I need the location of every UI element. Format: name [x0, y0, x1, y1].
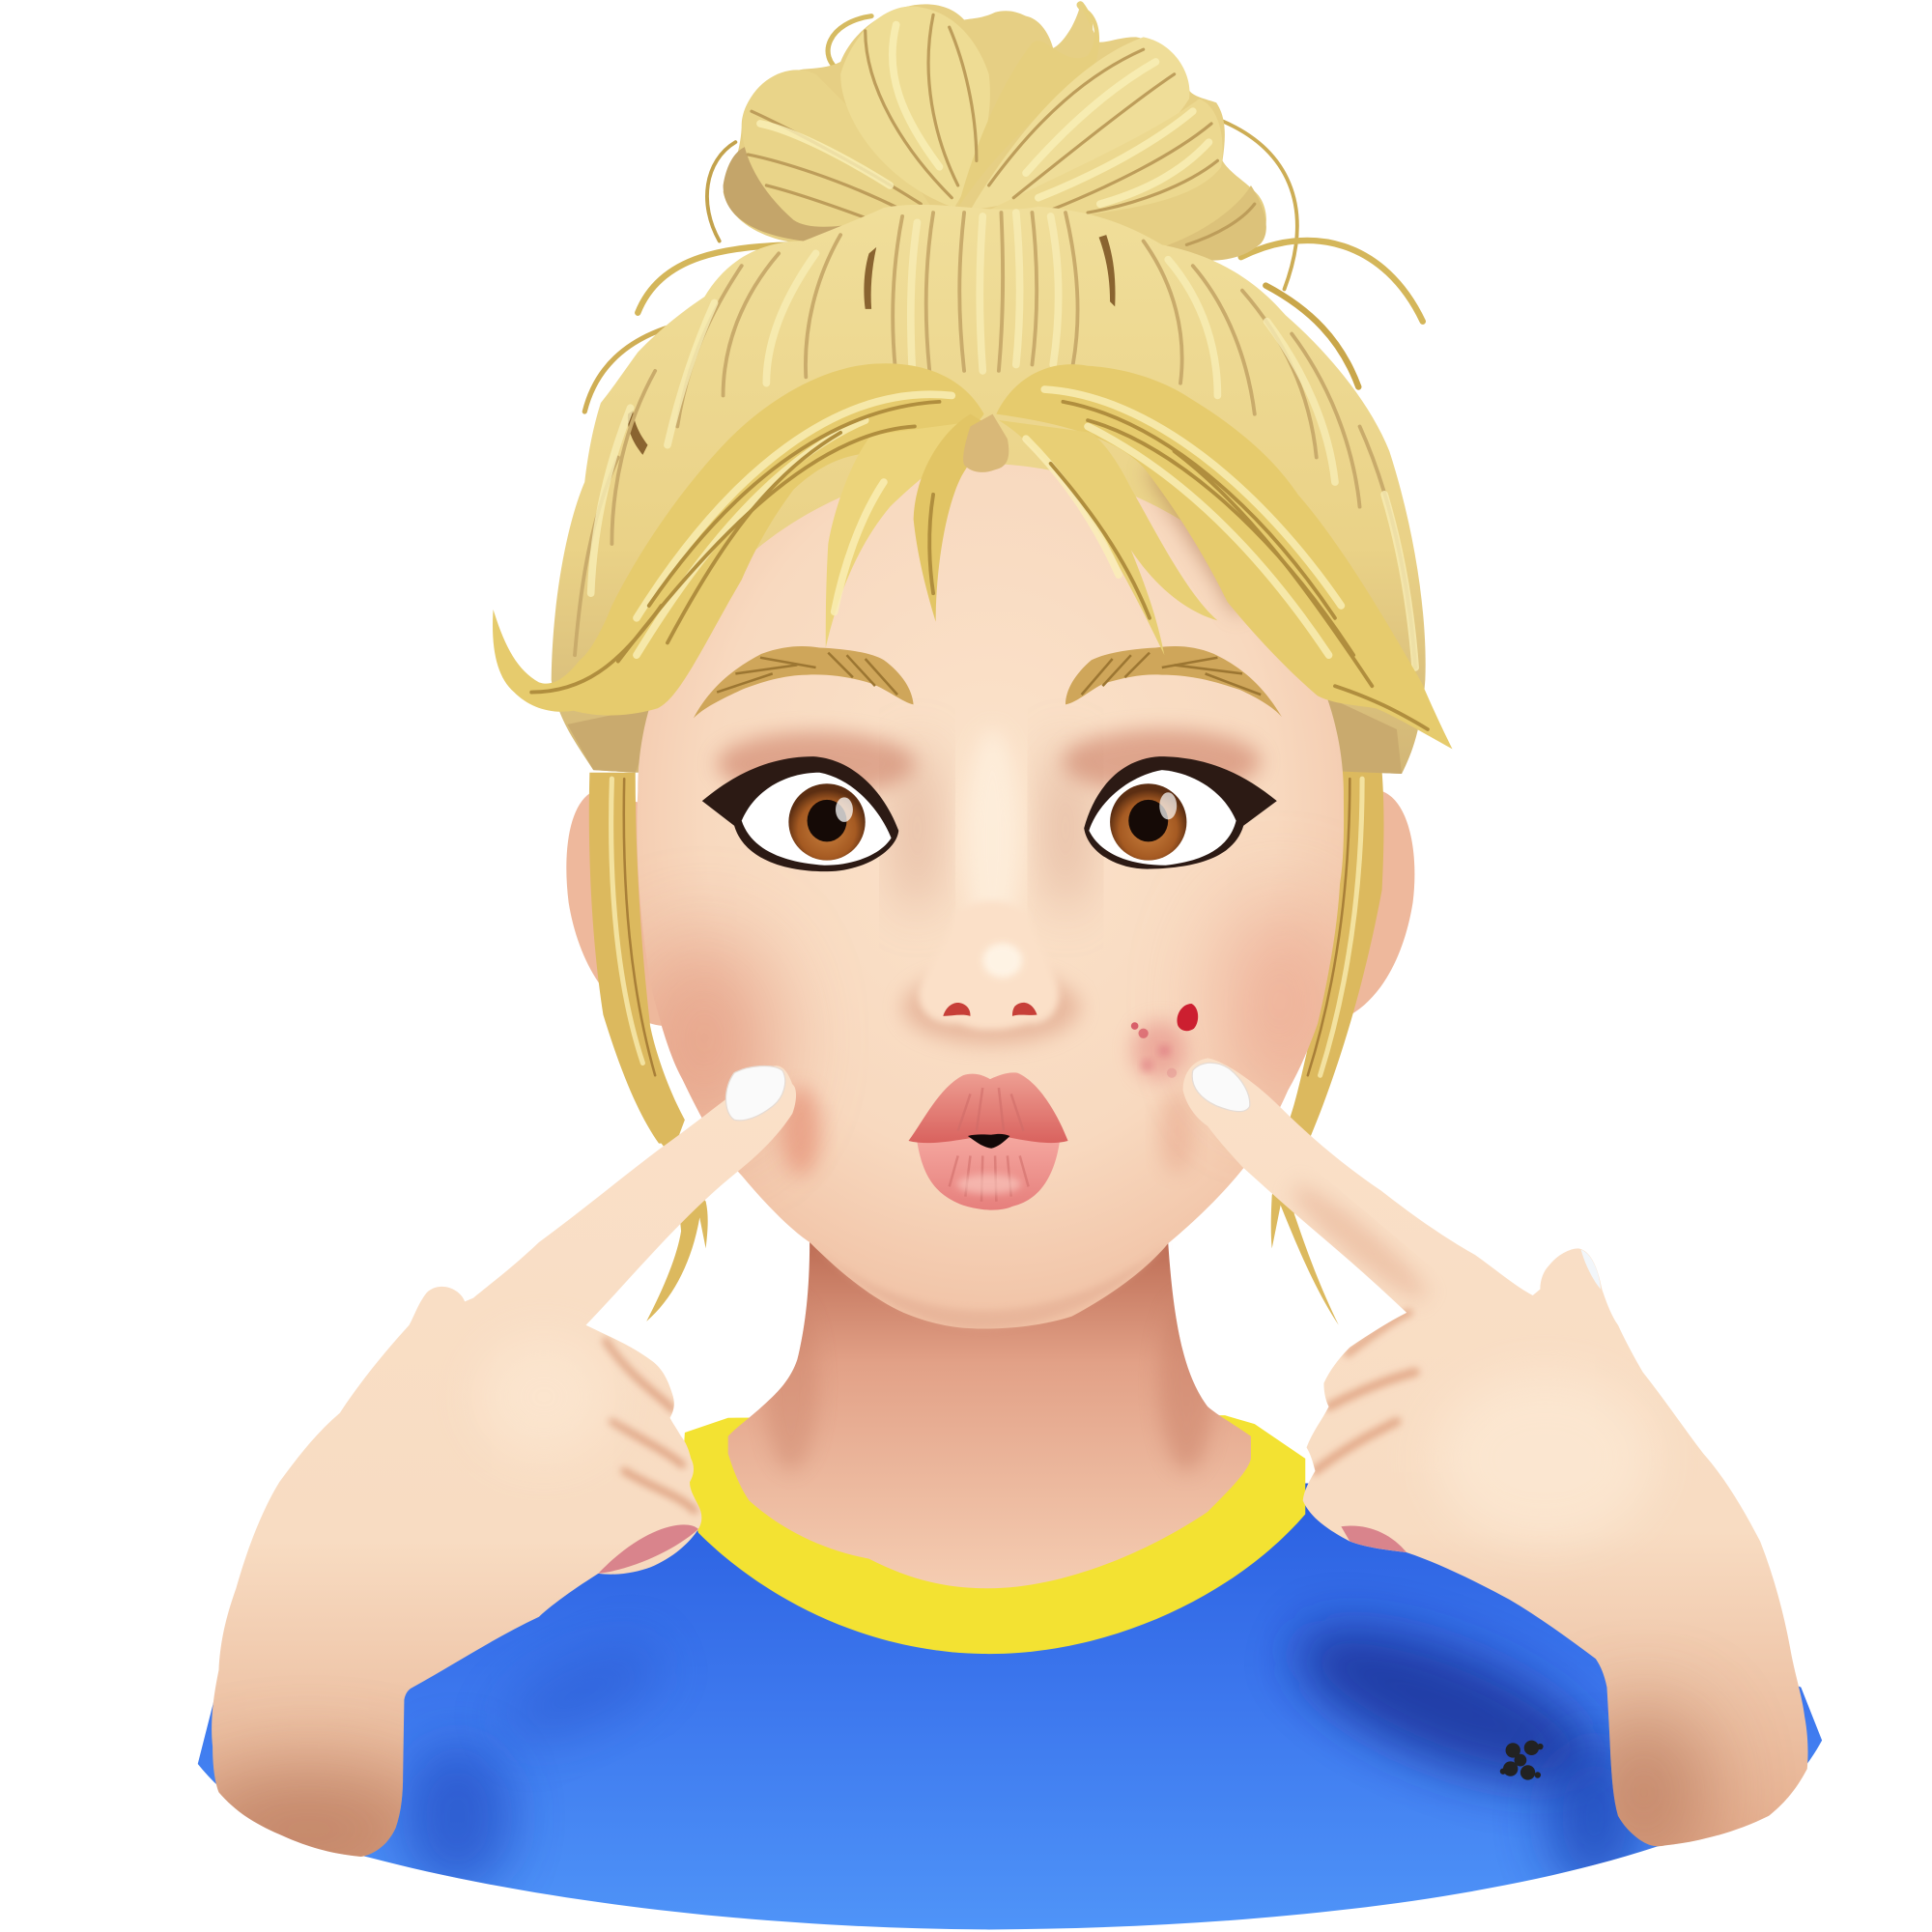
left finger creases	[606, 1341, 695, 1511]
right strand with tips	[999, 420, 1217, 655]
right eyebrow	[1065, 646, 1282, 717]
right palm crease	[1341, 1525, 1406, 1552]
hair: side strands behind the face	[589, 771, 1384, 1325]
face	[631, 464, 1344, 1329]
right fingernail	[1192, 1063, 1250, 1112]
left eyebrow	[694, 646, 914, 718]
right thumb nail	[1581, 1250, 1601, 1290]
right hand lower arm shading	[1582, 1706, 1706, 1879]
hair: main updo mass	[552, 205, 1426, 774]
hair: fringe and swept bangs	[493, 363, 1453, 749]
cheek blush left	[631, 933, 779, 1144]
right swept band	[996, 364, 1453, 749]
hair: tan side sections above the ears	[567, 693, 1402, 774]
right finger creases	[1315, 1313, 1415, 1471]
left hand lower arm shading	[213, 1723, 404, 1857]
fingertip redness	[781, 1087, 821, 1176]
left fingernail	[725, 1065, 785, 1121]
hair parting gaps	[628, 235, 1116, 455]
shadow around the nose base	[902, 970, 1080, 1044]
forehead shadow under bangs	[1144, 468, 1261, 618]
small dark mark on shirt	[1500, 1741, 1544, 1780]
hair: stray wisps	[584, 5, 1423, 412]
lips	[908, 1072, 1068, 1210]
acne blemish	[1131, 1004, 1198, 1080]
cheek blush right	[1217, 896, 1341, 1106]
left eye	[702, 756, 898, 871]
left hand pointing at cheek	[212, 1065, 796, 1857]
right back of hand highlight	[1445, 1383, 1642, 1540]
left palm crease	[598, 1524, 698, 1574]
left short strand	[914, 414, 991, 622]
hair: top bun	[724, 4, 1266, 261]
neck	[728, 1242, 1251, 1588]
center parting tuft	[963, 414, 1009, 472]
chin shading	[810, 1242, 1168, 1329]
left back of hand highlight	[500, 1364, 612, 1435]
shirt	[198, 1484, 1822, 1929]
shirt collar	[684, 1415, 1305, 1654]
left swept band	[493, 363, 984, 716]
ears	[566, 791, 1414, 1026]
right hand pointing at cheek	[1183, 1058, 1808, 1879]
right finger underside shading	[1293, 1184, 1427, 1300]
left long strand	[826, 420, 982, 648]
nose	[919, 901, 1060, 1030]
nose bridge highlight	[966, 734, 1020, 902]
eye socket shading	[717, 732, 915, 796]
right eye	[1084, 756, 1277, 869]
